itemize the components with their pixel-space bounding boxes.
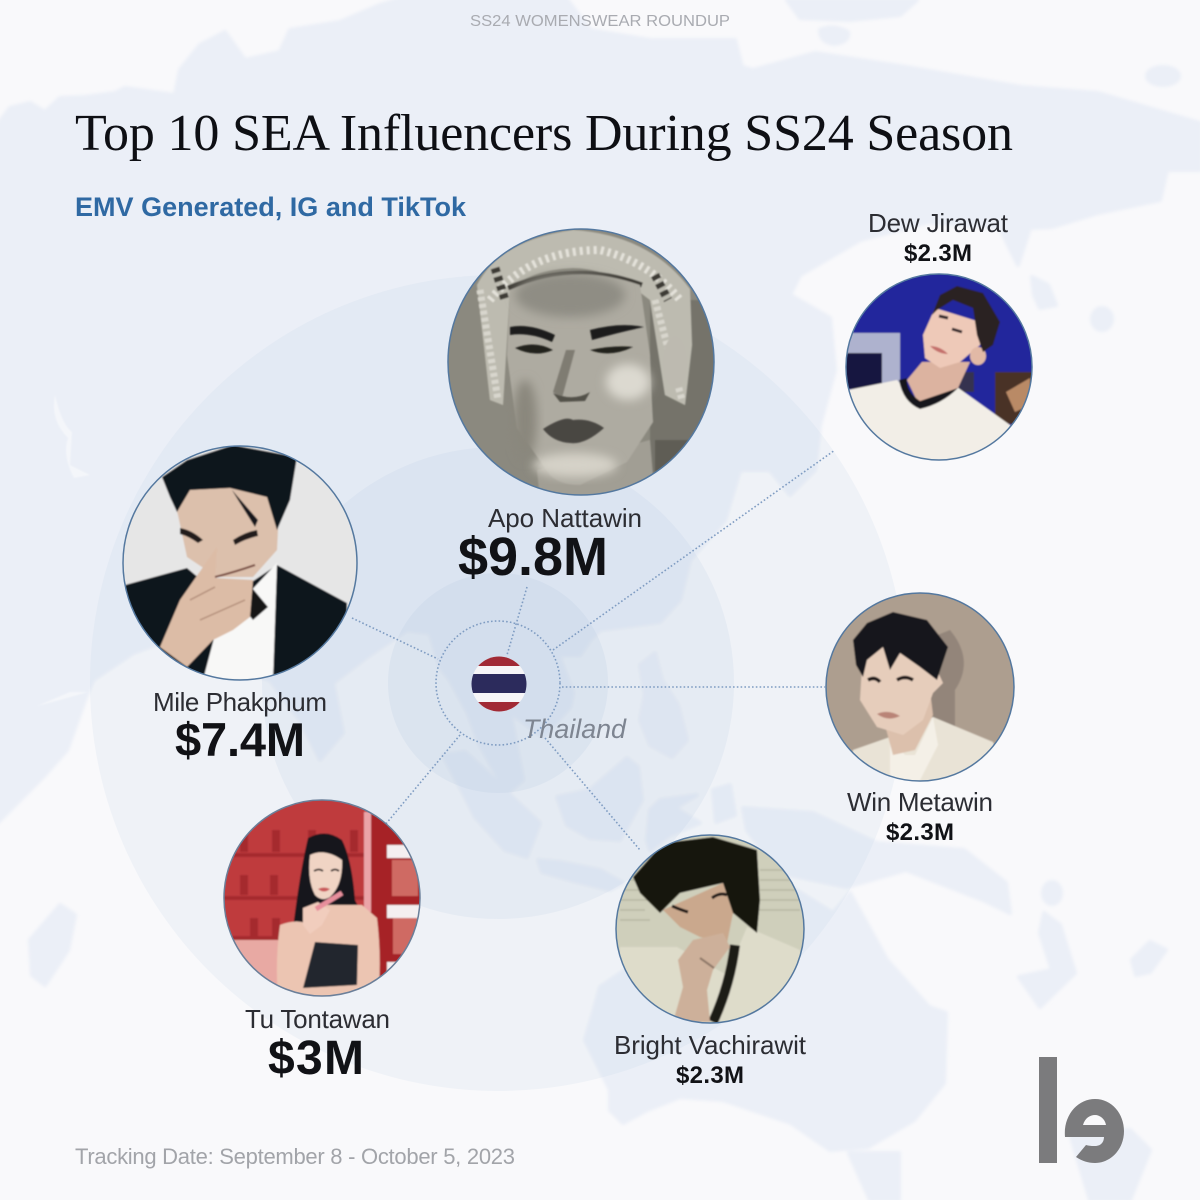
portrait: Dew Jirawat: [845, 273, 1033, 461]
portrait: Tu Tontawan: [222, 798, 426, 1000]
Thailand flag: [472, 656, 526, 712]
name: Bright Vachirawit: Bright Vachirawit: [614, 1030, 807, 1060]
Thailand label: Thailand: [523, 714, 627, 744]
name: Apo Nattawin: Apo Nattawin: [488, 503, 642, 533]
concentric rings around Thailand: [90, 275, 906, 1091]
value: Win Metawin: $2.3M: [886, 819, 954, 846]
value: Mile Phakphum: $7.4M: [175, 713, 305, 766]
portrait: Bright Vachirawit: [610, 833, 810, 1030]
tracking date footnote: Tracking Date: September 8 - October 5, 2023: [75, 1144, 515, 1169]
subtle white seas on map: [37, 395, 90, 706]
name: Mile Phakphum: Mile Phakphum: [153, 687, 327, 717]
value: Tu Tontawan: $3M: [268, 1032, 364, 1085]
portrait: Win Metawin: [824, 590, 1016, 790]
value: Apo Nattawin: $9.8M: [458, 527, 608, 587]
portrait: Apo Nattawin: [445, 225, 720, 500]
logo: [1039, 1057, 1124, 1163]
name: Dew Jirawat: Dew Jirawat: [868, 208, 1009, 238]
subtitle: EMV Generated, IG and TikTok: [75, 192, 467, 222]
title: Top 10 SEA Influencers During SS24 Season: [75, 105, 1013, 162]
name: Tu Tontawan: Tu Tontawan: [245, 1004, 390, 1034]
name: Win Metawin: Win Metawin: [847, 787, 993, 817]
connector lines: [352, 450, 835, 850]
value: Dew Jirawat: $2.3M: [904, 240, 972, 267]
header label: SS24 WOMENSWEAR ROUNDUP: [470, 13, 730, 30]
value: Bright Vachirawit: $2.3M: [676, 1062, 744, 1089]
portrait: Mile Phakphum: [120, 443, 360, 690]
